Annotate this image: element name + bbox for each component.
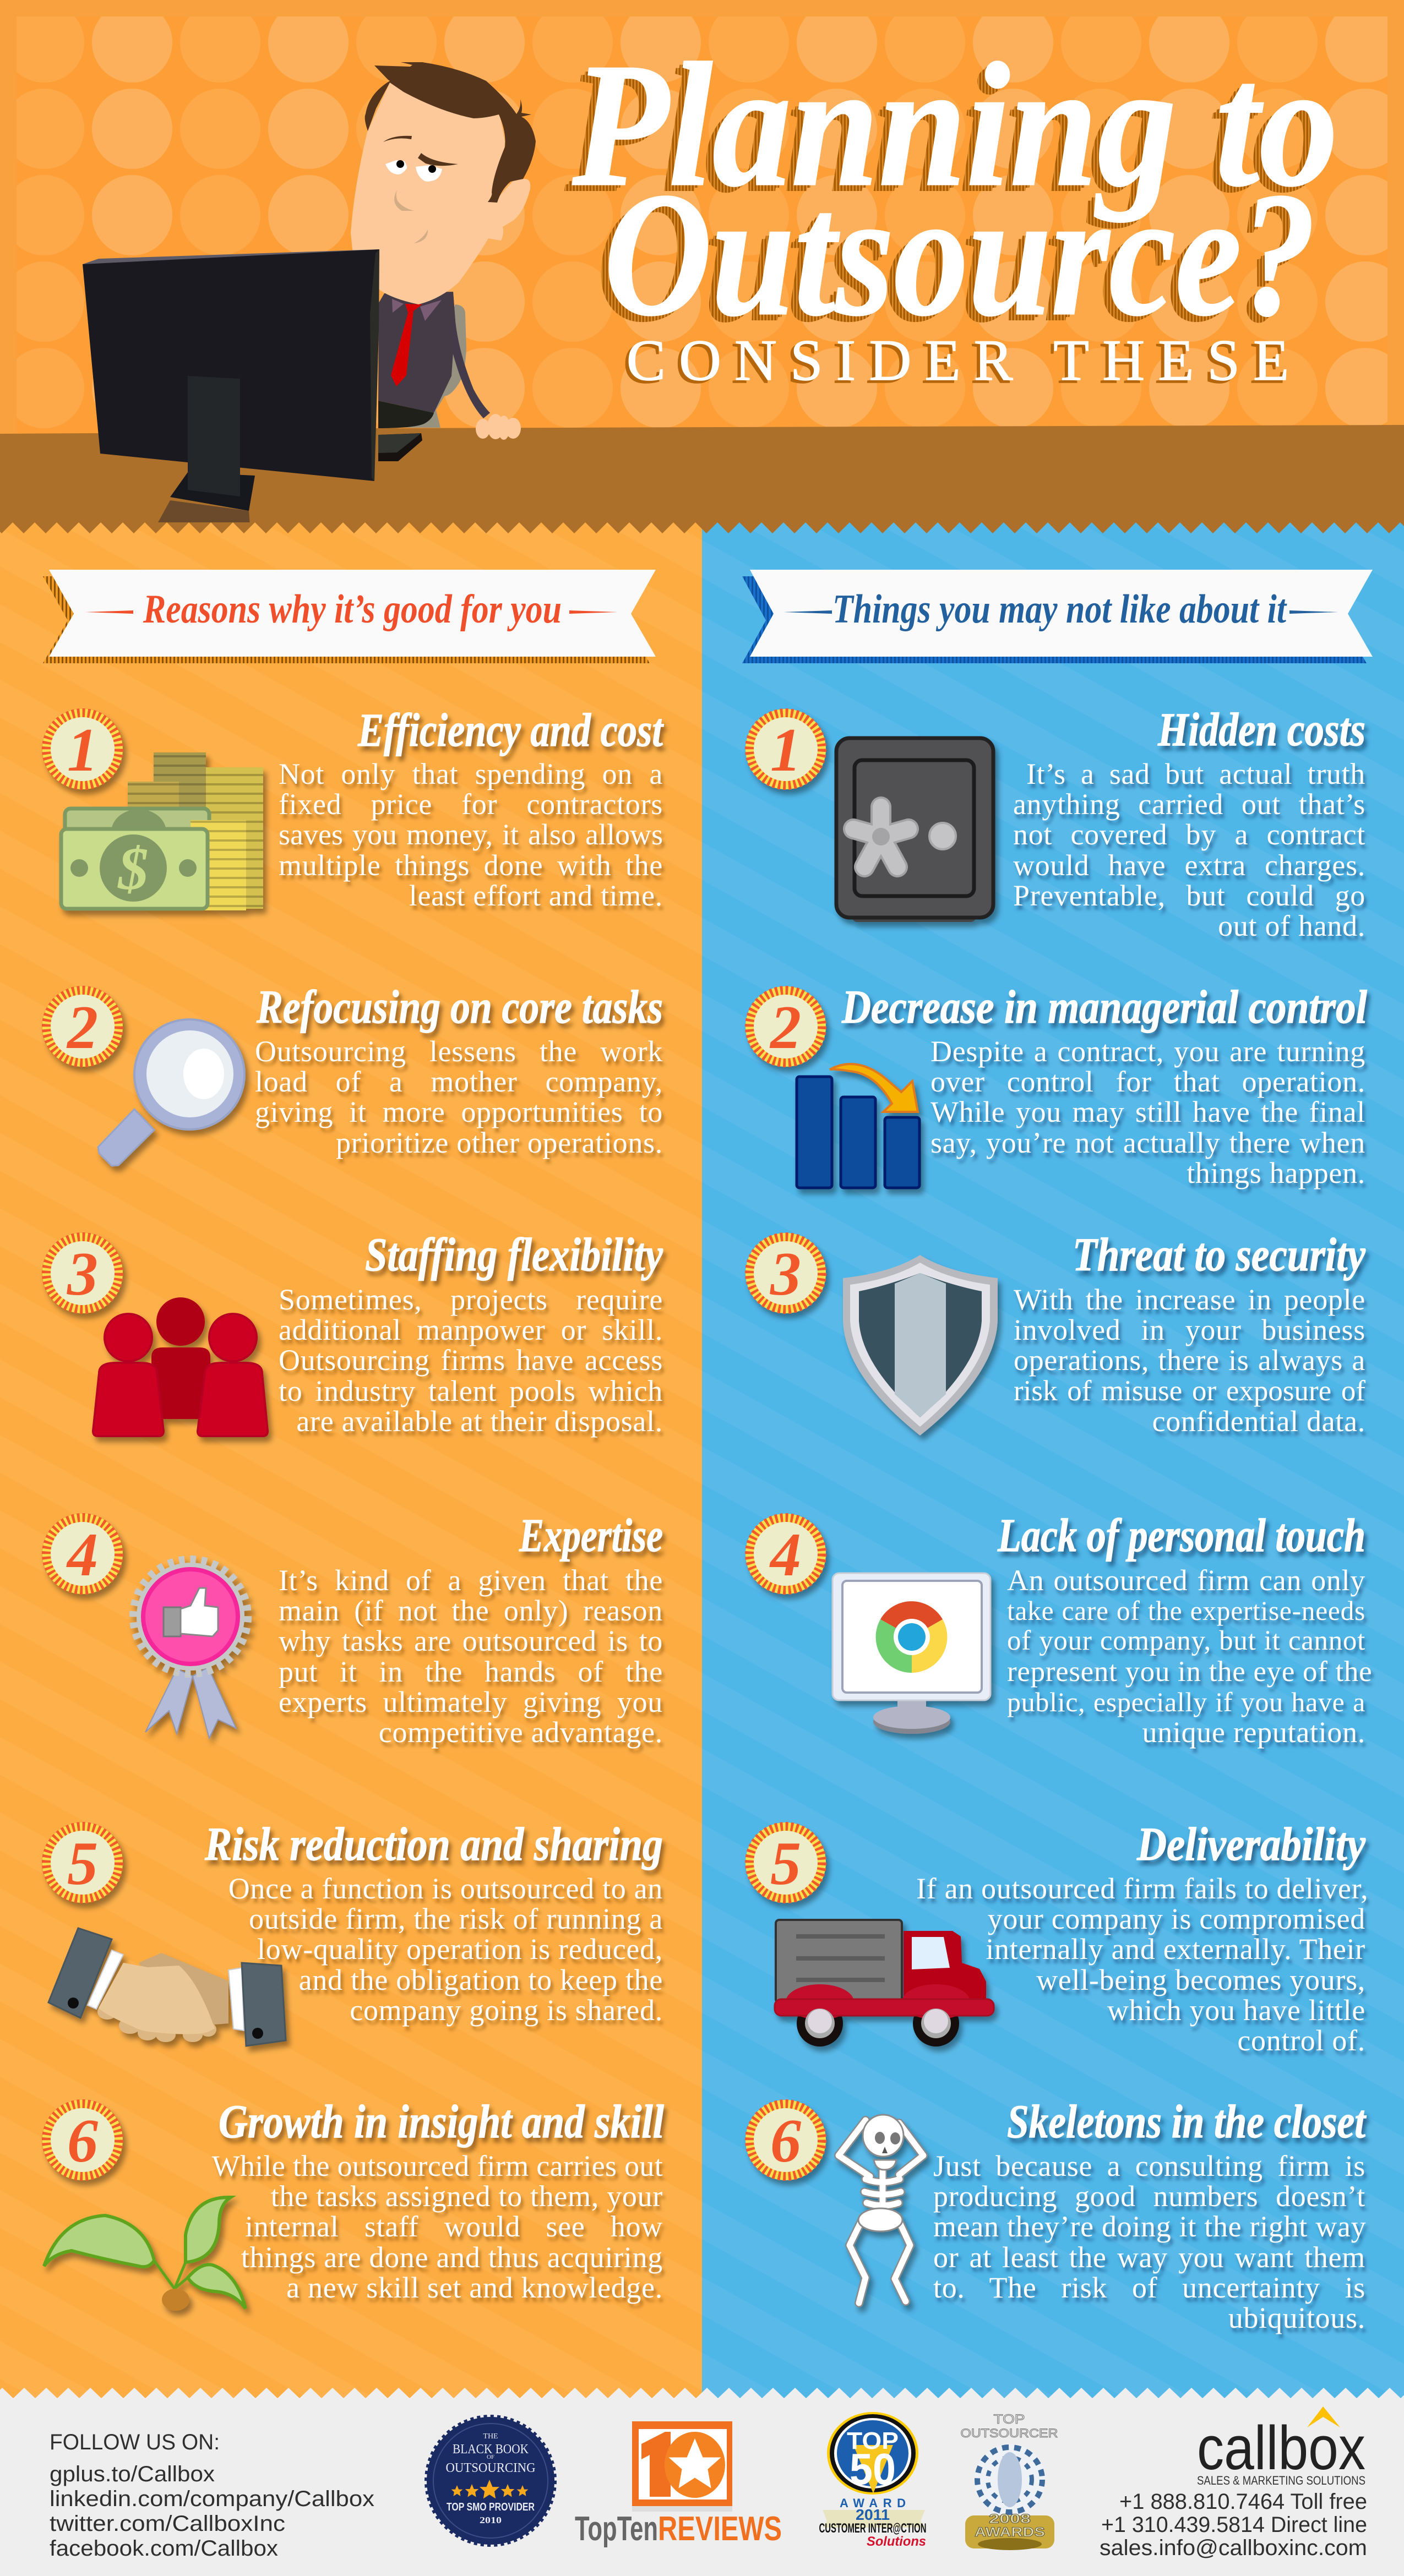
text: skeletons: or at least the way you want them: [933, 2241, 1365, 2274]
footer: top outsourcer award: AWARDS: [975, 2525, 1045, 2540]
footer: contact details: +1 888.810.7464 Toll free: [1119, 2490, 1367, 2514]
text: skeletons: [933, 2149, 1369, 2340]
footer: top 50 award badge: 50: [850, 2444, 896, 2493]
text: risk reduction: company going is shared.: [350, 1994, 663, 2027]
text: deliverability: [916, 1872, 1370, 2057]
text: expertise: main (if not the only) reason: [279, 1594, 663, 1627]
hand resting on desk: [476, 414, 521, 440]
text: personal touch: take care of the expertise-needs: [1007, 1596, 1365, 1626]
badge: right 4: 4: [769, 1521, 801, 1589]
text: deliverability: your company is compromised: [988, 1902, 1365, 1935]
text: efficiency and cost: multiple things done with the: [279, 849, 663, 882]
face: [351, 72, 530, 304]
text: skeletons: ubiquitous.: [1228, 2301, 1365, 2334]
arm: [453, 292, 490, 418]
footer: top outsourcer award: 2008: [989, 2512, 1031, 2526]
footer: follow us block: twitter.com/CallboxInc: [50, 2512, 285, 2536]
text: growth: While the outsourced firm carries out: [212, 2149, 663, 2182]
text: threat to security: With the increase in people: [1014, 1283, 1365, 1316]
footer: follow us block: gplus.to/Callbox: [50, 2462, 215, 2486]
footer: top 50 award badge: CUSTOMER INTER@CTION: [819, 2521, 926, 2536]
text: decrease in control: say, you’re not actually there when: [930, 1126, 1365, 1159]
text: growth: the tasks assigned to them, your: [271, 2180, 663, 2213]
icon: award rosette with thumbs up: [134, 1560, 247, 1738]
desk surface: [0, 425, 1404, 522]
text: risk reduction: outside firm, the risk of running a: [249, 1902, 663, 1935]
text: refocusing: Outsourcing lessens the work: [255, 1035, 663, 1068]
text: expertise: put it in the hands of the: [279, 1655, 663, 1688]
text: hidden costs: out of hand.: [1218, 909, 1365, 942]
heading: hidden costs: Hidden costs: [1157, 703, 1365, 756]
text: growth: internal staff would see how: [245, 2210, 663, 2243]
panel: left column background: [0, 522, 702, 2398]
text: staffing flexibility: additional manpower or skill.: [279, 1313, 663, 1346]
badge: left 2: [42, 986, 123, 1067]
badge: left 6: 6: [67, 2107, 98, 2175]
text: staffing flexibility: are available at their disposal.: [296, 1405, 663, 1438]
text: refocusing: giving it more opportunities to: [255, 1095, 663, 1128]
torso: [378, 292, 455, 413]
title: [562, 26, 1338, 359]
footer: black book award badge: BLACK BOOK: [453, 2442, 529, 2457]
text: efficiency and cost: saves you money, it also allows: [279, 818, 663, 851]
footer: top ten reviews logo: TopTen: [575, 2510, 658, 2548]
footer: top outsourcer award: OUTSOURCER: [960, 2426, 1058, 2440]
text: hidden costs: [1013, 757, 1368, 942]
icon: shield: [843, 1255, 998, 1436]
text: hidden costs: It’s a sad but actual truth: [1026, 757, 1365, 790]
text: staffing flexibility: to industry talent pools which: [279, 1374, 663, 1407]
text: decrease in control: over control for that operation.: [930, 1065, 1365, 1098]
keyboard: [378, 433, 422, 461]
badge: right 2: 2: [769, 994, 801, 1062]
text: decrease in control: [930, 1035, 1369, 1195]
text: efficiency and cost: Not only that spending on a: [279, 757, 663, 790]
text: hidden costs: would have extra charges.: [1013, 849, 1365, 882]
panel: right ribbon heading: Things you may not like about it: [832, 587, 1287, 632]
footer: top outsourcer award: [960, 2412, 1058, 2550]
panel: left ribbon heading: Reasons why it’s good for you: [143, 587, 562, 632]
badge: right 4: [745, 1514, 826, 1594]
text: personal touch: of your company, but it cannot: [1007, 1625, 1365, 1656]
badge: right 3: 3: [770, 1240, 801, 1308]
text: refocusing: [255, 1035, 665, 1165]
text: growth: things are done and thus acquiring: [241, 2241, 663, 2274]
mouth crease: [414, 230, 428, 243]
badge: right 5: [745, 1822, 826, 1903]
footer: black book award badge: OF: [487, 2454, 494, 2460]
text: decrease in control: things happen.: [1187, 1156, 1365, 1189]
illustration: man at computer (back layer): [351, 62, 536, 428]
badge: right 6: [745, 2100, 826, 2180]
text: decrease in control: While you may still have the final: [930, 1095, 1365, 1128]
text: hidden costs: not covered by a contract: [1013, 818, 1365, 851]
hair: [365, 62, 536, 203]
text: decrease in control: Despite a contract, you are turning: [930, 1035, 1365, 1068]
eyes: [385, 160, 407, 174]
footer: black book award badge: 2010: [480, 2515, 502, 2525]
heading: efficiency and cost: Efficiency and cost: [357, 703, 665, 756]
footer: callbox logo: SALES & MARKETING SOLUTIONS: [1197, 2474, 1365, 2487]
text: hidden costs: Preventable, but could go: [1013, 879, 1365, 912]
text: deliverability: which you have little: [1107, 1994, 1365, 2027]
panel: right ribbon heading: [742, 570, 1373, 663]
text: hidden costs: anything carried out that’s: [1013, 788, 1365, 821]
footer: black book award badge: THE: [483, 2432, 498, 2441]
panel: right column background: [702, 522, 1404, 2398]
heading: risk reduction: Risk reduction and sharing: [204, 1818, 663, 1870]
footer: top 50 award badge: Solutions: [867, 2534, 926, 2549]
trousers: [378, 401, 434, 428]
footer: top outsourcer award: TOP: [993, 2412, 1025, 2427]
badge: right 1: 1: [770, 716, 801, 784]
icon: falling bar chart with arrow: [797, 1064, 919, 1188]
text: threat to security: [1014, 1283, 1369, 1438]
text: expertise: It’s kind of a given that the: [279, 1564, 663, 1597]
badge: left 6: [42, 2100, 123, 2180]
panel: left ribbon heading: [43, 570, 656, 663]
text: risk reduction: and the obligation to keep the: [299, 1963, 663, 1996]
text: growth: a new skill set and knowledge.: [286, 2271, 663, 2304]
text: deliverability: If an outsourced firm fails to deliver,: [916, 1872, 1368, 1905]
monitor: [83, 249, 379, 533]
text: threat to security: involved in your business: [1014, 1313, 1365, 1346]
footer: contact details: [1100, 2490, 1367, 2560]
text: skeletons: to. The risk of uncertainty is: [933, 2271, 1365, 2304]
badge: right 1: [745, 709, 826, 789]
title: Planning to: [562, 33, 1330, 230]
text: deliverability: internally and externally. Their: [986, 1933, 1365, 1966]
footer: black book award badge: OUTSOURCING: [446, 2461, 535, 2475]
text: efficiency and cost: [279, 757, 666, 912]
subtitle: CONSIDER THESE: [627, 328, 1289, 392]
footer: callbox logo: callbox: [1197, 2414, 1365, 2482]
icon: money and coins: $: [117, 835, 149, 902]
badge: left 1: 1: [67, 716, 98, 784]
heading: staffing flexibility: Staffing flexibility: [365, 1228, 663, 1281]
text: deliverability: well-being becomes yours,: [1036, 1963, 1365, 1996]
text: refocusing: load of a mother company,: [255, 1065, 663, 1098]
collar: [392, 299, 404, 313]
icon: handshake: [48, 1928, 286, 2046]
text: skeletons: mean they’re doing it the right way: [933, 2210, 1366, 2243]
badge: left 3: 3: [67, 1240, 98, 1308]
text: efficiency and cost: fixed price for contractors: [279, 788, 663, 821]
text: deliverability: control of.: [1237, 2024, 1365, 2057]
footer: black book award badge: TOP SMO PROVIDER: [447, 2501, 535, 2513]
text: staffing flexibility: Sometimes, projects require: [279, 1283, 663, 1316]
tie: [391, 304, 422, 386]
text: expertise: [279, 1564, 665, 1754]
text: skeletons: producing good numbers doesn’t: [933, 2180, 1365, 2213]
panel: header frame: [0, 0, 1404, 440]
text: expertise: experts ultimately giving you: [279, 1685, 663, 1718]
footer: contact details: sales.info@callboxinc.com: [1100, 2536, 1367, 2560]
footer: follow us block: facebook.com/Callbox: [50, 2536, 278, 2561]
nose: [394, 190, 414, 211]
icon: magnifying glass: [98, 1019, 244, 1166]
text: efficiency and cost: least effort and time.: [409, 879, 663, 912]
text: risk reduction: low-quality operation is reduced,: [257, 1933, 663, 1966]
icon: monitor with browser logo: [832, 1573, 991, 1734]
footer: top 50 award badge: 2011: [856, 2506, 890, 2523]
heading: deliverability: Deliverability: [1136, 1818, 1366, 1870]
subtitle: CONSIDER THESE: [623, 331, 1286, 395]
text: staffing flexibility: Outsourcing firms have access: [279, 1344, 663, 1377]
text: expertise: competitive advantage.: [379, 1716, 663, 1749]
text: risk reduction: [228, 1872, 665, 2032]
footer: contact details: +1 310.439.5814 Direct line: [1101, 2513, 1367, 2537]
badge: left 1: [42, 709, 123, 789]
text: expertise: why tasks are outsourced is to: [279, 1624, 663, 1657]
footer: top 50 award badge: [819, 2412, 926, 2549]
icon: delivery truck: [775, 1920, 994, 2046]
heading: expertise: Expertise: [519, 1509, 663, 1562]
badge: left 5: 5: [67, 1830, 98, 1898]
text: personal touch: unique reputation.: [1142, 1716, 1365, 1749]
text: personal touch: [1007, 1564, 1375, 1754]
text: threat to security: confidential data.: [1152, 1405, 1365, 1438]
text: risk reduction: Once a function is outsourced to an: [228, 1872, 663, 1905]
chair: [406, 304, 466, 428]
icon: team of people: [93, 1297, 268, 1436]
badge: left 4: 4: [66, 1521, 98, 1589]
footer: top 50 award badge: TOP: [847, 2427, 899, 2454]
zigzag edge below header: [0, 522, 1404, 533]
badge: right 5: 5: [770, 1830, 801, 1898]
badge: right 3: [745, 1233, 826, 1313]
badge: left 2: 2: [66, 994, 98, 1062]
text: personal touch: An outsourced firm can only: [1007, 1564, 1365, 1597]
badge: left 3: [42, 1233, 123, 1313]
footer: follow us block: FOLLOW US ON:: [50, 2430, 220, 2454]
icon: plant sprout: [44, 2197, 246, 2311]
footer: follow us block: [50, 2430, 374, 2561]
text: personal touch: public, especially if you have a: [1007, 1687, 1365, 1717]
footer: follow us block: linkedin.com/company/Callbox: [50, 2487, 374, 2511]
text: skeletons: Just because a consulting firm is: [933, 2149, 1365, 2182]
badge: right 2: [745, 986, 826, 1067]
brows: [383, 136, 412, 142]
footer: black book award badge: [427, 2417, 554, 2545]
icon: safe: [836, 738, 993, 922]
icon: money and coins: [61, 752, 263, 910]
text: staffing flexibility: [279, 1283, 665, 1443]
badge: left 4: [42, 1514, 123, 1594]
badge: right 6: 6: [770, 2107, 801, 2175]
footer: top ten reviews logo: [575, 2421, 782, 2548]
footer: top ten reviews logo: REVIEWS: [658, 2510, 782, 2548]
badge: left 5: [42, 1822, 123, 1903]
panel: header wallpaper: [17, 17, 1387, 440]
icon: skeleton: [839, 2115, 923, 2303]
text: threat to security: operations, there is always a: [1014, 1344, 1365, 1377]
text: refocusing: prioritize other operations.: [336, 1126, 663, 1159]
text: personal touch: represent you in the eye of the: [1007, 1656, 1372, 1688]
text: threat to security: risk of misuse or exposure of: [1014, 1375, 1365, 1407]
footer: top 50 award badge: AWARD: [840, 2496, 906, 2510]
panel: footer background: [0, 2388, 1404, 2576]
heading: refocusing: Refocusing on core tasks: [256, 980, 663, 1033]
heading: growth: Growth in insight and skill: [219, 2095, 664, 2148]
text: growth: [211, 2149, 666, 2310]
